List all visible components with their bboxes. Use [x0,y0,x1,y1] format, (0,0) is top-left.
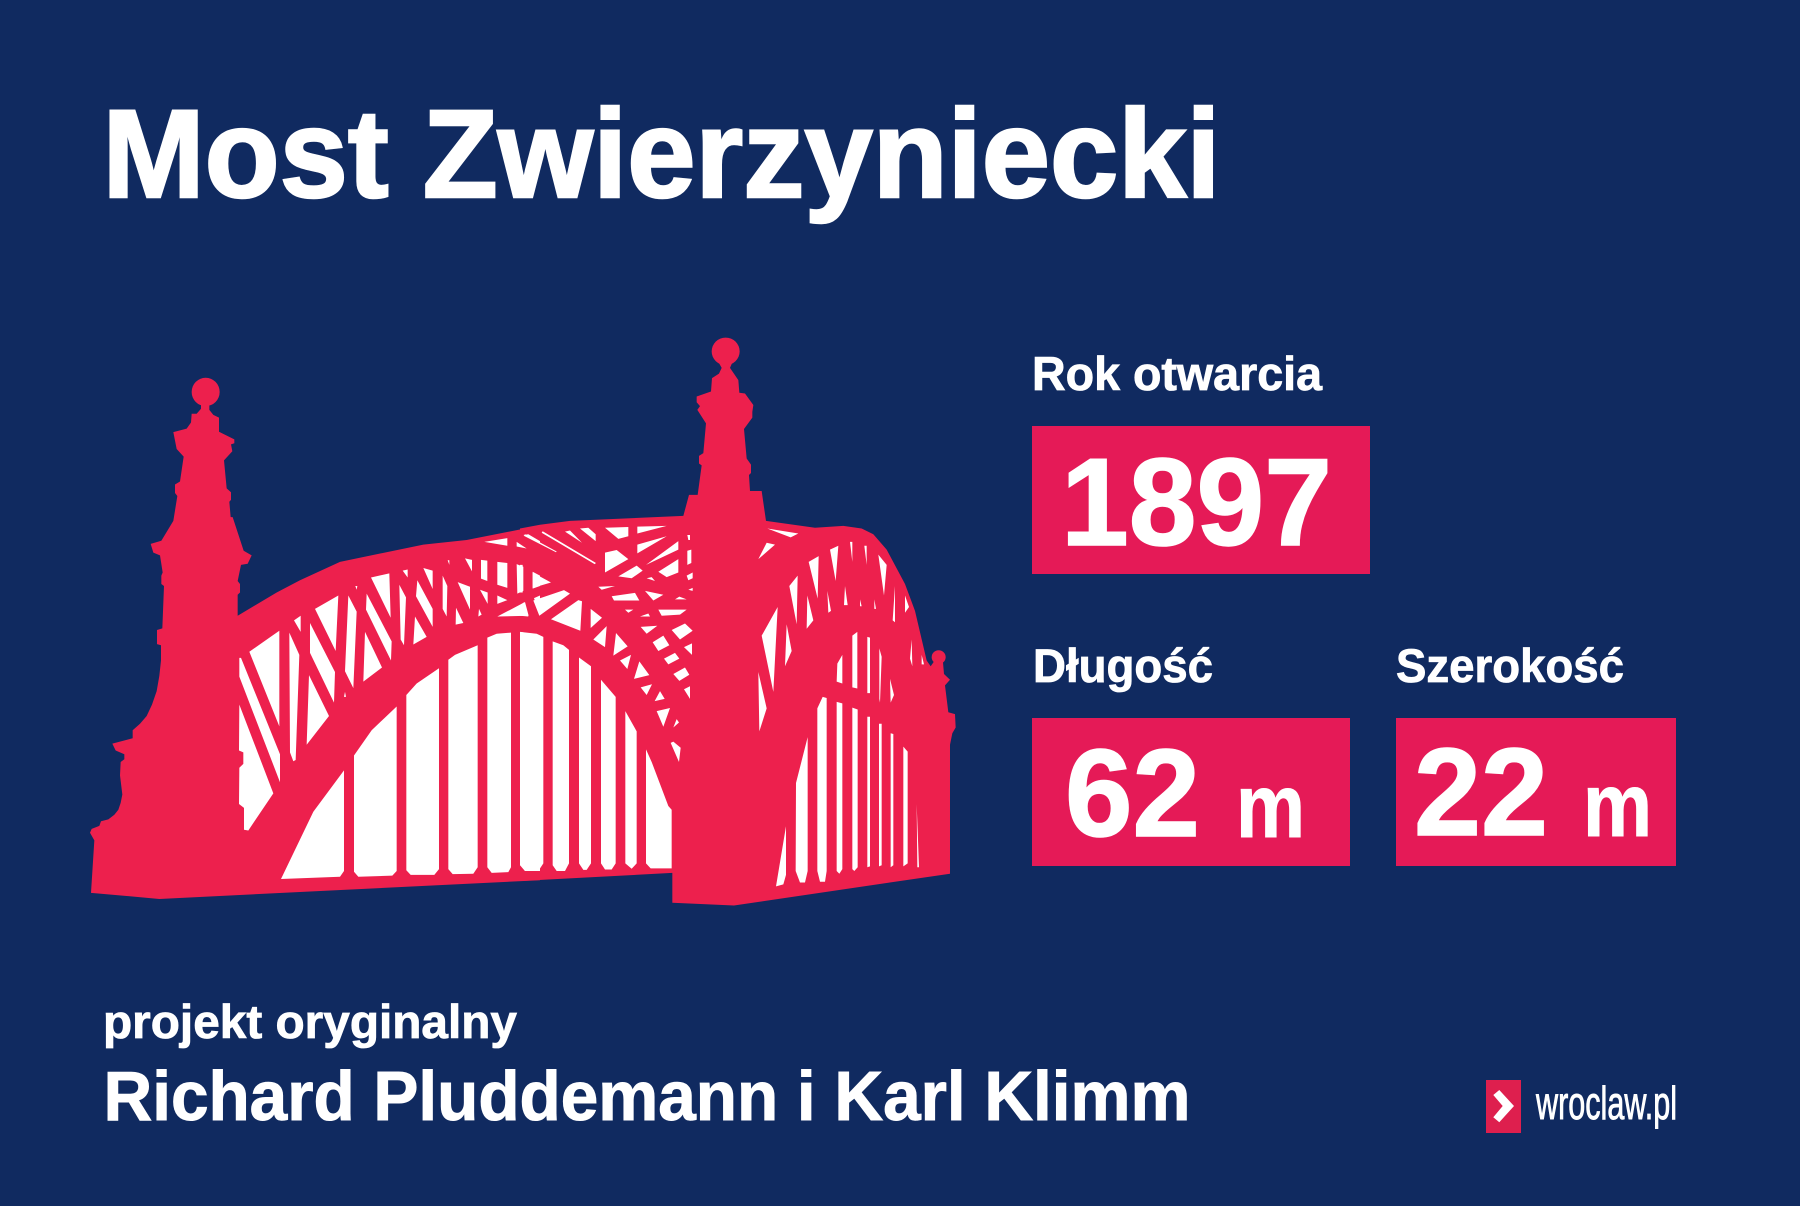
logo: wroclaw.pl: wroclaw.pl [1535,1077,1677,1129]
logo: wroclaw.pl [1486,1077,1677,1133]
value box: 62 m [1032,718,1350,866]
label: Rok otwarcia: Rok otwarcia [1032,347,1323,400]
stat: width [1396,639,1676,866]
value box: 22 m: m [1583,756,1652,856]
title: Most Zwierzyniecki [102,85,1220,224]
value box: 22 m [1396,718,1676,866]
value box: 62 m: m [1236,757,1305,857]
label: Szerokość: Szerokość [1396,639,1624,692]
stat: length [1032,639,1350,866]
credit: original design label: projekt oryginalny [103,995,517,1048]
label: Długość: Długość [1033,639,1213,692]
stat: year of opening [1032,347,1370,574]
credit: designers: Richard Pluddemann i Karl Klimm [104,1057,1190,1135]
illustration: bridge silhouette [90,338,956,905]
value box: 1897: 1897 [1061,434,1332,572]
value box: 22 m: 22 [1414,724,1548,862]
icon: red chevron square [1486,1080,1521,1133]
value box: 62 m: 62 [1065,725,1200,863]
